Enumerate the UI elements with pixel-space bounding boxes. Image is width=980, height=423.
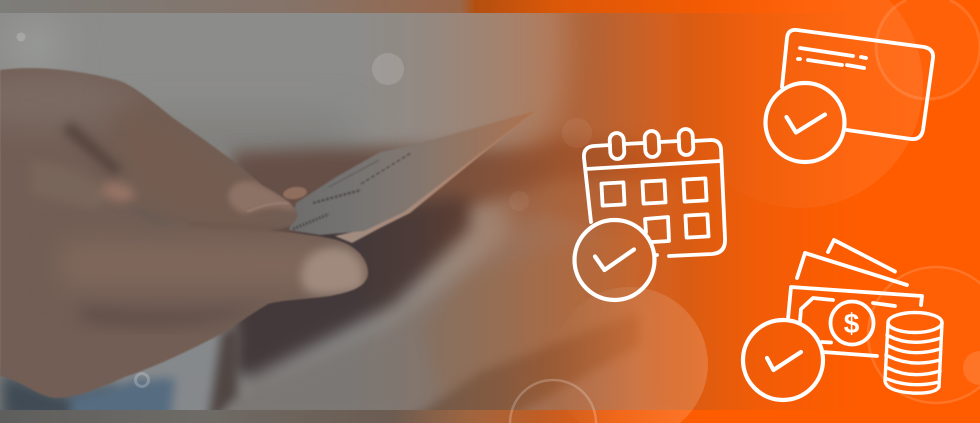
fingertip behind card [282, 185, 308, 201]
hand [0, 68, 368, 398]
dollar sign: $ [844, 308, 860, 339]
finger contact shadow [190, 224, 290, 230]
card face [289, 111, 535, 235]
bottom brown stripe [418, 318, 638, 410]
card edge [335, 111, 535, 243]
hand shading [0, 70, 365, 328]
background photo: blurred room [0, 13, 800, 410]
coin stack [885, 312, 942, 393]
index fingernail [228, 181, 296, 214]
dark lap shadow [232, 195, 470, 378]
gap between fingers [125, 203, 183, 225]
palm crease [62, 122, 122, 176]
embossed card numbers [293, 153, 411, 229]
icon: money and coins with check [743, 240, 942, 400]
middle finger [30, 160, 110, 210]
icon: calendar with check [574, 129, 725, 300]
icon: credit card with check [766, 30, 933, 162]
thumb nail [301, 247, 365, 295]
brown band [232, 138, 700, 332]
right brown backdrop [492, 13, 677, 410]
top band [0, 0, 980, 13]
credit card in hand [282, 111, 535, 243]
thumb pad shadow [84, 306, 226, 328]
bottom band [0, 410, 980, 423]
light lower area [227, 216, 622, 410]
middle fingernail [99, 179, 137, 205]
thumb top [67, 244, 306, 284]
